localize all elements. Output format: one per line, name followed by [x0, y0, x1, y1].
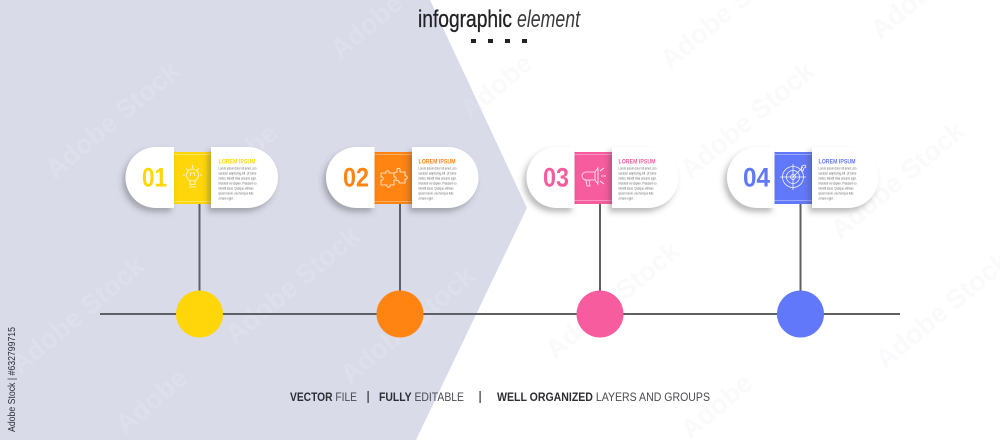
text block 02: ornare eget. [418, 196, 434, 200]
text block 01: tincidunt vel sapien. Praesent eu [218, 180, 256, 186]
left pill 02 [326, 147, 374, 208]
title: infographic [418, 6, 512, 33]
text block 01: LOREM IPSUM [218, 160, 256, 166]
text block 04: tincidunt vel sapien. Praesent eu [818, 180, 856, 186]
step 01 [125, 147, 278, 338]
number 04: 04 [743, 162, 770, 192]
number 03: 03 [543, 162, 569, 192]
text block 01: sectetur adipiscing elit. Ut tortor [218, 170, 257, 176]
text block 03: ornare eget. [618, 196, 634, 200]
text block 01: metus, blandit vitae posuere eget, [218, 176, 256, 180]
text block 02: blandit lacus. Quisque ultricies [418, 186, 454, 190]
text block 03: tincidunt vel sapien. Praesent eu [618, 180, 656, 186]
icon: light bulb [183, 165, 202, 187]
text block 01: blandit lacus. Quisque ultricies [218, 186, 254, 190]
text block 04: ipsum lorem, nec tempus felis [818, 190, 854, 196]
connector 02 [399, 204, 401, 314]
footer tagline: WELL ORGANIZED LAYERS AND GROUPS [497, 390, 710, 404]
watermark: Adobe Stock [5, 250, 151, 380]
icon: megaphone [582, 168, 606, 186]
text block 01: Lorem ipsum dolor sit amet, con [218, 166, 256, 170]
left pill 03 [526, 147, 574, 208]
text block 04: sectetur adipiscing elit. Ut tortor [818, 170, 857, 176]
text: Adobe Stock [825, 115, 971, 245]
text block 02: sectetur adipiscing elit. Ut tortor [418, 170, 457, 176]
right pill 02 [412, 147, 478, 208]
watermark: Adobe Stock [335, 260, 481, 390]
color band 04 [774, 152, 814, 204]
text block 02: tincidunt vel sapien. Praesent eu [418, 180, 456, 186]
text: Adobe Stock [675, 55, 821, 185]
number 02: 02 [343, 162, 369, 192]
connector 03 [599, 204, 601, 314]
text block 02: ipsum lorem, nec tempus felis [418, 190, 454, 196]
left pill 01 [125, 147, 174, 208]
right pill 01 [211, 147, 278, 208]
node circle 04 [777, 290, 824, 338]
text block 03: LOREM IPSUM [618, 160, 656, 166]
text block 04: Lorem ipsum dolor sit amet, con [818, 166, 856, 170]
title: element [517, 6, 581, 33]
text: Adobe Stock [540, 235, 686, 365]
watermark: Adobe [110, 363, 193, 440]
right pill 03 [612, 147, 678, 208]
text block 03: sectetur adipiscing elit. Ut tortor [618, 170, 657, 176]
step 03 [526, 147, 678, 338]
text block 03: blandit lacus. Quisque ultricies [618, 186, 654, 190]
icon: puzzle [381, 168, 407, 187]
watermark [5, 0, 481, 440]
text block 03: metus, blandit vitae posuere eget, [618, 176, 656, 180]
footer tagline [290, 390, 710, 404]
connector 04 [800, 204, 802, 314]
timeline line [100, 313, 900, 315]
background panel: lavender arrow shape [0, 0, 527, 440]
text block 03 [618, 160, 657, 200]
text block 03: Lorem ipsum dolor sit amet, con [618, 166, 656, 170]
text block 01: ipsum lorem, nec tempus felis [218, 190, 254, 196]
text block 01: ornare eget. [218, 196, 234, 200]
text block 02: LOREM IPSUM [418, 160, 456, 166]
watermark: Adobe Stock [40, 55, 186, 185]
connector 01 [198, 204, 200, 314]
node circle 02 [376, 290, 424, 338]
watermark: Adobe Stock [220, 220, 366, 350]
number 01: 01 [142, 162, 167, 192]
text block 04: ornare eget. [818, 196, 834, 200]
color band 02 [374, 152, 414, 204]
text block 01 [218, 160, 257, 200]
text: Adobe [455, 48, 538, 125]
footer tagline: VECTOR FILE [290, 390, 357, 404]
text block 04: metus, blandit vitae posuere eget, [818, 176, 856, 180]
text block 04: blandit lacus. Quisque ultricies [818, 186, 854, 190]
text block 02 [418, 160, 457, 200]
text block 04: LOREM IPSUM [818, 160, 856, 166]
text block 04 [818, 160, 857, 200]
stock id side label: Adobe Stock | #632799715 [7, 327, 18, 432]
watermark: Adobe [200, 118, 283, 195]
text block 02: metus, blandit vitae posuere eget, [418, 176, 456, 180]
node circle 03 [576, 290, 624, 338]
footer tagline: FULLY EDITABLE [379, 390, 464, 404]
node circle 01 [176, 290, 223, 338]
text block 03: ipsum lorem, nec tempus felis [618, 190, 654, 196]
right pill 04 [812, 147, 878, 208]
text block 02: Lorem ipsum dolor sit amet, con [418, 166, 456, 170]
icon: target [780, 164, 806, 190]
step 02 [326, 147, 478, 338]
left pill 04 [727, 147, 774, 208]
color band 03 [574, 152, 614, 204]
step 04 [727, 147, 878, 338]
color band 01 [173, 152, 213, 204]
title dots [471, 39, 527, 43]
